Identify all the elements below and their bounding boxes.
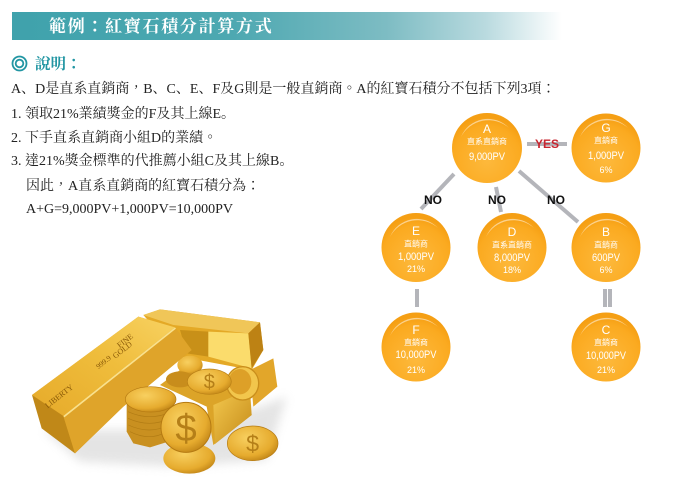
node E: 1,000PV [398, 251, 435, 263]
node C: 21% [597, 365, 615, 375]
node F: 10,000PV [396, 349, 437, 361]
node F [382, 312, 450, 382]
illustration: gold bars and coins: FINE [115, 332, 135, 350]
node C: 直銷商 [594, 337, 618, 347]
illustration: gold bars and coins: 999.9 [94, 353, 113, 371]
item 1: 1. 領取21%業績獎金的F及其上線E。 [11, 107, 235, 122]
node E: 21% [407, 264, 425, 274]
chart: connector lines [417, 144, 610, 307]
illustration: gold bars and coins: $ [175, 407, 197, 450]
conclusion: 因此，A直系直銷商的紅寶石積分為： [26, 179, 260, 194]
heading text: 說明： [35, 56, 82, 73]
illustration: gold bars and coins: GOLD [111, 340, 134, 360]
illustration: gold bars and coins: $ [246, 431, 259, 457]
node B: B [602, 225, 610, 239]
node A [452, 113, 522, 183]
node F: 直銷商 [404, 337, 428, 347]
node F: 21% [407, 365, 425, 375]
node G: 直銷商 [594, 135, 618, 145]
node C: C [602, 323, 611, 337]
node D [478, 213, 546, 282]
title banner [12, 12, 562, 40]
intro line: A、D是直系直銷商，B、C、E、F及G則是一般直銷商。A的紅寶石積分不包括下列3項： [11, 82, 555, 97]
node C [572, 312, 640, 382]
node F: F [412, 323, 420, 337]
node D: 18% [503, 265, 521, 275]
label: NO left: NO [424, 193, 442, 207]
node B [572, 213, 640, 282]
node D: 直系直銷商 [492, 240, 532, 250]
node A: 直系直銷商 [467, 136, 507, 146]
node E: E [412, 224, 420, 238]
label: YES: YES [535, 137, 559, 151]
explanation text block [11, 80, 555, 217]
node A: A [483, 122, 491, 136]
label: NO middle: NO [488, 193, 506, 207]
node G: 6% [599, 165, 613, 175]
node G [572, 114, 640, 182]
node E [382, 213, 450, 282]
formula: A+G=9,000PV+1,000PV=10,000PV [26, 202, 233, 217]
item 2: 2. 下手直系直銷商小組D的業績。 [11, 131, 217, 146]
node G: G [601, 121, 611, 135]
node C: 10,000PV [586, 350, 627, 362]
illustration: gold bars and coins: LIBERTY [43, 382, 75, 410]
node G: 1,000PV [588, 150, 625, 162]
node E: 直銷商 [404, 238, 428, 248]
node A: 9,000PV [469, 151, 506, 163]
title: 範例：紅寶石積分計算方式 [49, 17, 273, 36]
icon: double circle [12, 56, 28, 72]
label: NO right: NO [547, 193, 565, 207]
illustration: gold bars and coins [32, 309, 287, 474]
item 3: 3. 達21%獎金標準的代推薦小組C及其上線B。 [11, 154, 293, 169]
node D: D [508, 225, 517, 239]
node B: 直銷商 [594, 240, 618, 250]
node D: 8,000PV [494, 252, 531, 264]
illustration: gold bars and coins: $ [204, 371, 215, 393]
node B: 6% [599, 265, 613, 275]
node B: 600PV [592, 252, 621, 264]
section heading: explanation [12, 56, 82, 73]
